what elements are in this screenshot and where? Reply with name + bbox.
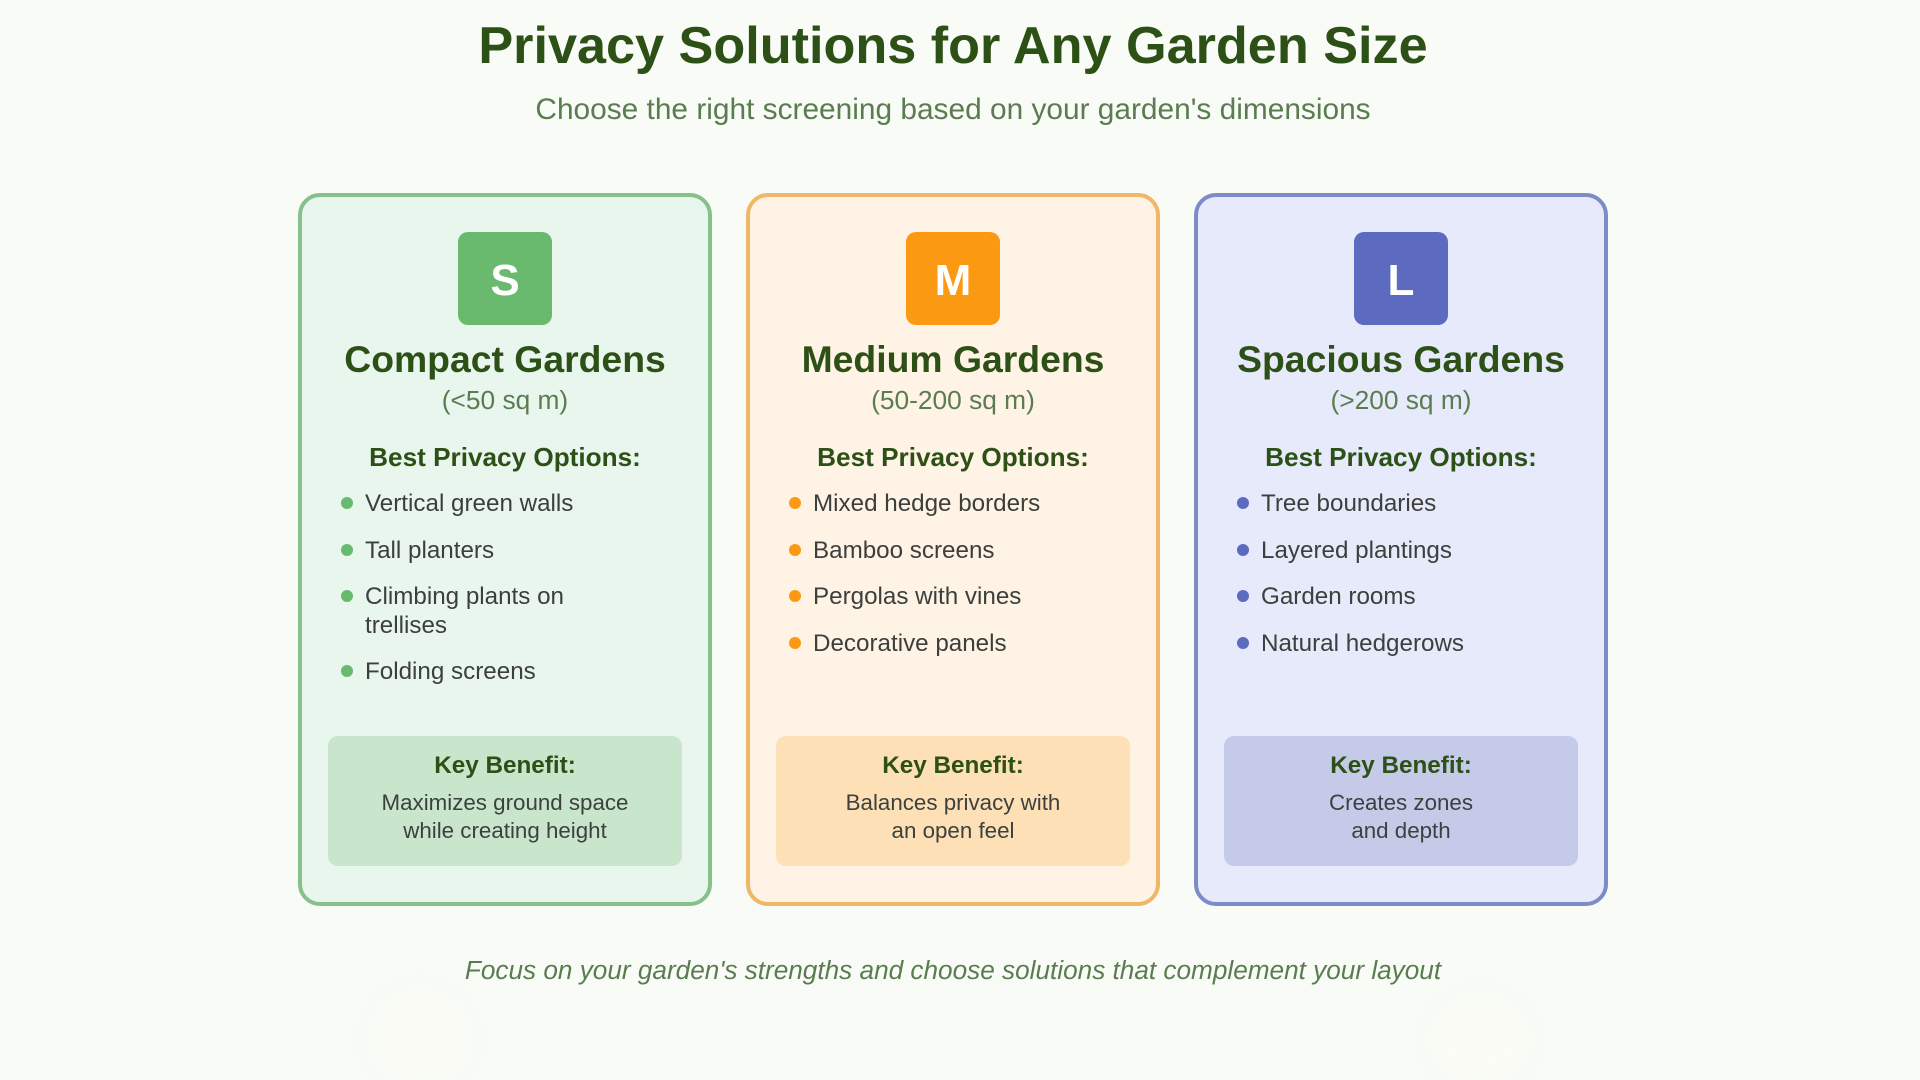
options heading: Best Privacy Options: <box>817 442 1089 472</box>
option: natural hedgerows: Natural hedgerows <box>1261 630 1464 657</box>
icon: L badge <box>1354 232 1448 325</box>
panel: compact gardens <box>298 193 712 906</box>
option: vertical green walls: Vertical green walls <box>365 490 573 517</box>
icon: M badge: M <box>935 256 971 305</box>
option: tree boundaries: Tree boundaries <box>1261 490 1436 517</box>
option: folding screens: Folding screens <box>365 658 536 685</box>
callout: key benefit <box>328 736 682 866</box>
panel: spacious gardens <box>1194 193 1608 906</box>
size range: (50-200 sq m) <box>871 385 1035 415</box>
icon: S badge: S <box>490 256 520 305</box>
icon: S badge <box>458 232 552 325</box>
option: tall planters: Tall planters <box>365 537 494 564</box>
icon: M badge <box>906 232 1000 325</box>
key benefit line 2: an open feel <box>892 818 1014 843</box>
title: Privacy Solutions for Any Garden Size <box>478 17 1428 75</box>
icon: L badge: L <box>1388 256 1414 305</box>
key benefit heading: Key Benefit: <box>882 752 1024 779</box>
key benefit line 1: Maximizes ground space <box>382 790 628 815</box>
option: mixed hedge borders: Mixed hedge borders <box>813 490 1040 517</box>
option: climbing plants: Climbing plants on <box>365 583 564 610</box>
callout: key benefit <box>776 736 1130 866</box>
option: bamboo screens: Bamboo screens <box>813 537 995 564</box>
option: decorative panels: Decorative panels <box>813 630 1007 657</box>
option: layered plantings: Layered plantings <box>1261 537 1452 564</box>
callout: key benefit <box>1224 736 1578 866</box>
option: pergolas with vines: Pergolas with vines <box>813 583 1021 610</box>
size range: (>200 sq m) <box>1330 385 1472 415</box>
key benefit line 1: Creates zones <box>1329 790 1473 815</box>
option: climbing plants: trellises <box>365 612 447 638</box>
key benefit heading: Key Benefit: <box>1330 752 1472 779</box>
size range: (<50 sq m) <box>442 385 568 415</box>
option: garden rooms: Garden rooms <box>1261 583 1416 610</box>
heading: spacious gardens: Spacious Gardens <box>1237 338 1565 380</box>
key benefit line 1: Balances privacy with <box>846 790 1060 815</box>
option: climbing plants <box>341 583 564 638</box>
options heading: Best Privacy Options: <box>1265 442 1537 472</box>
key benefit line 2: and depth <box>1351 818 1451 843</box>
heading: compact gardens: Compact Gardens <box>344 338 666 380</box>
footer note: Focus on your garden's strengths and choose solutions that complement your layout <box>465 955 1441 985</box>
options heading: Best Privacy Options: <box>369 442 641 472</box>
key benefit line 2: while creating height <box>403 818 607 843</box>
subtitle: Choose the right screening based on your garden's dimensions <box>535 93 1371 126</box>
panel: medium gardens <box>746 193 1160 906</box>
key benefit heading: Key Benefit: <box>434 752 576 779</box>
heading: medium gardens: Medium Gardens <box>802 338 1104 380</box>
